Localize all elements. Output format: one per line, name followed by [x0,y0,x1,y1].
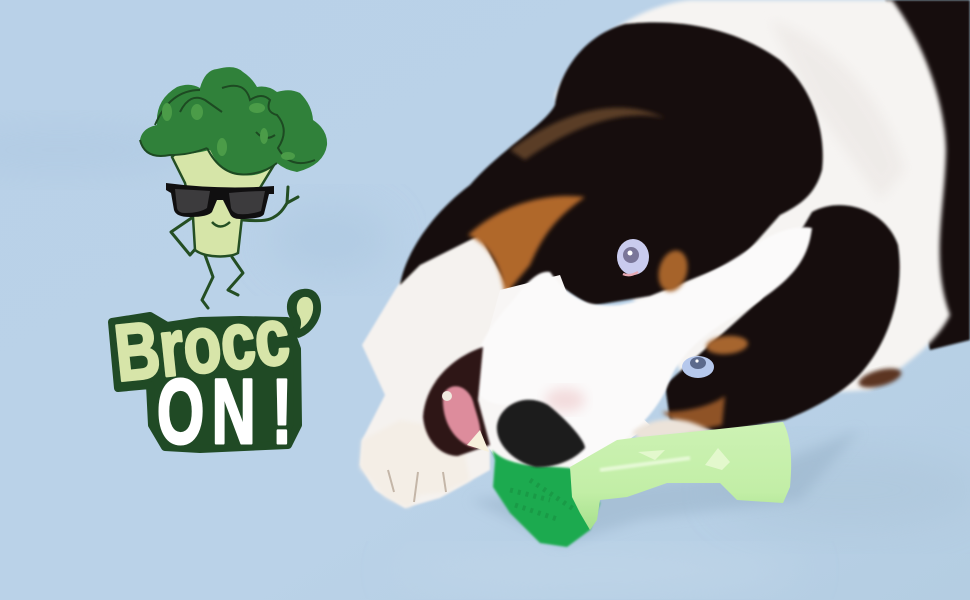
dog: tan cheek patch [468,196,585,295]
logo: ON!: ON! [157,359,292,463]
dog: right ear and lower face [665,205,900,432]
dog: lower eye [682,356,714,378]
dog [360,0,970,545]
dog: white under-muzzle fill [478,275,650,470]
dog: brown brow streaks [510,108,665,160]
dog: fang [467,430,489,452]
dog: mouth [423,347,490,456]
mascot: broccoli character [140,67,327,308]
mascot: legs and arms [171,187,298,308]
dog: brown fringe under ear [857,365,903,391]
dog: nose [497,400,585,467]
dog: upper eye [617,239,649,275]
logo: Brocc' ON! [111,289,321,463]
dog: muzzle pink tint [545,388,585,412]
mascot: stalk [172,120,277,256]
dog: white neck and shoulder [555,0,950,400]
dog: black head [400,22,823,306]
dog: white foreleg [360,233,520,508]
mascot: broccoli crown [140,67,327,176]
dog: tan spot by upper eye [654,247,692,295]
logo: Brocc: Brocc [111,291,293,399]
logo: apostrophe [287,289,321,338]
logo: backing [112,316,298,449]
toy: pale green stem [570,422,791,530]
dog: white blaze and muzzle [472,227,812,468]
dog: tan spot above lower eye [705,334,749,356]
toy: highlights [638,448,730,470]
toy: green broccoli head [492,450,600,547]
mascot: sunglasses [166,183,274,219]
dog: black back [885,0,970,350]
dog: white chin under jaw [632,419,712,440]
dog: floor shadow [470,430,860,545]
dog: tan jaw patch [662,396,725,432]
mascot: smile [212,222,230,226]
toy: broccoli chew [492,422,791,547]
dog: paw toes [360,420,470,508]
